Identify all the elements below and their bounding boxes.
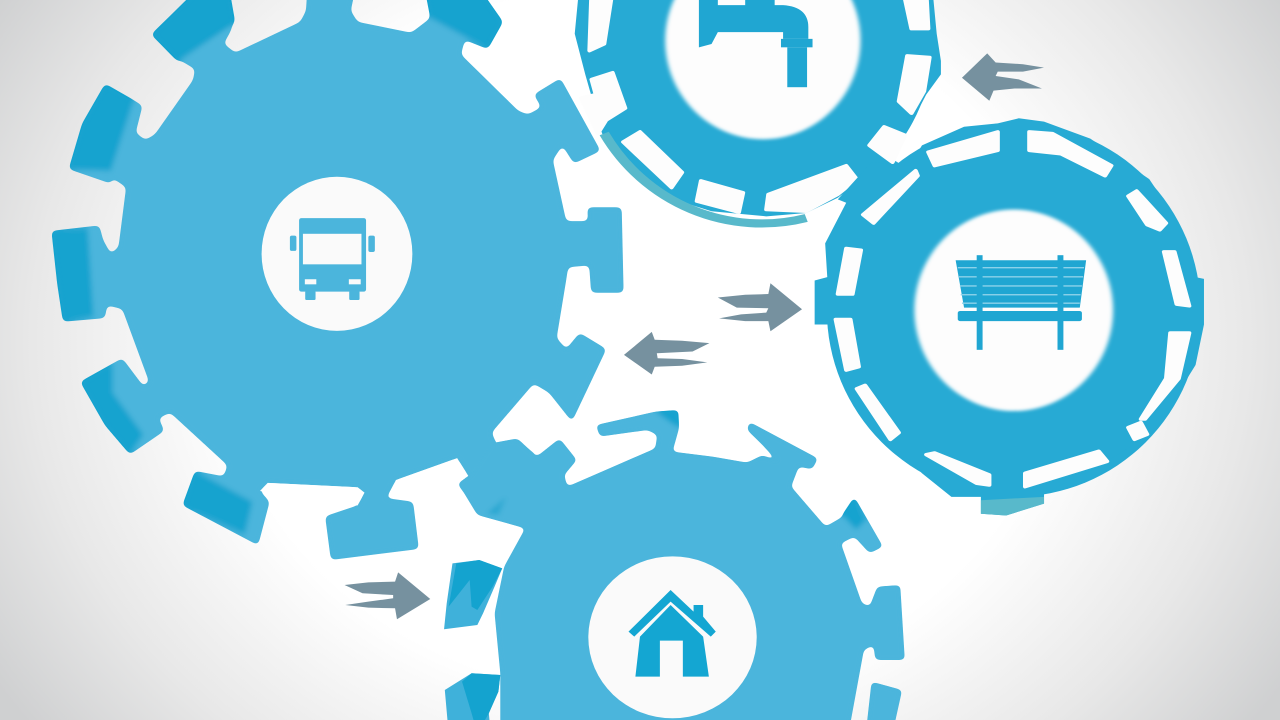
tooth: left upper [444,560,502,629]
arrow: lower middle, pointing left [624,332,709,375]
arrow: middle, pointing right [718,283,802,331]
gear: faucet [575,0,941,223]
icon: house [588,556,757,718]
gear: bus [51,0,624,560]
gear: house [444,410,905,720]
center opening [914,210,1113,411]
center opening [665,0,861,139]
icon: bus [262,177,412,331]
icon: faucet [699,0,813,87]
arrow: upper right, pointing left [962,53,1044,101]
white slots [836,132,1189,487]
icon: bench [956,255,1086,350]
lip: lower rim [604,134,806,223]
arrow: bottom left, pointing right [345,572,430,619]
gear: bench [815,118,1204,515]
white gap slabs [260,458,469,507]
tooth: left lower [445,673,500,720]
white slots [581,0,930,212]
